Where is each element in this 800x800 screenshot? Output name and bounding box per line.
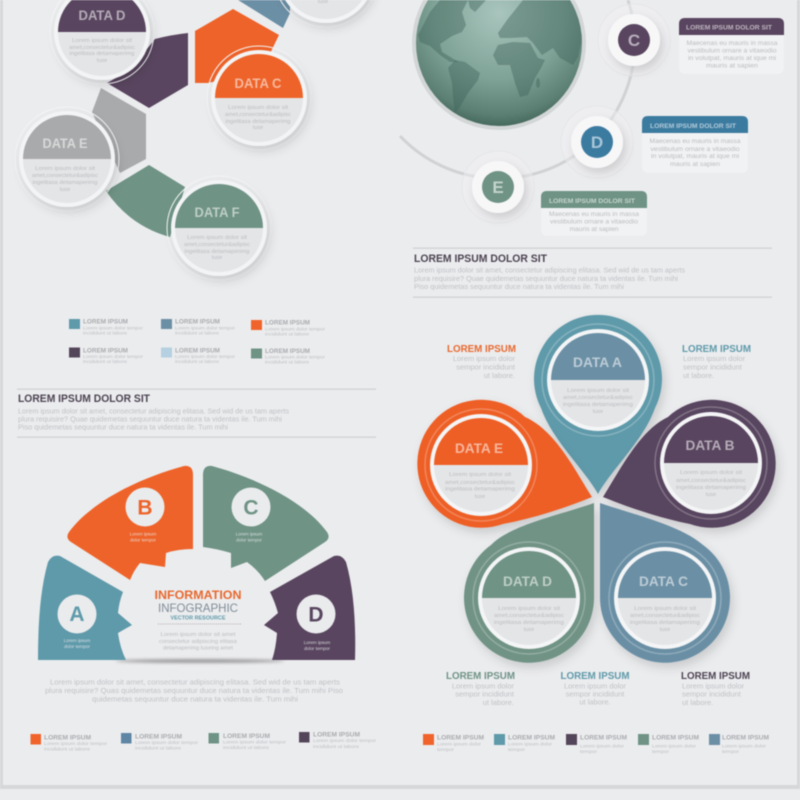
- label box D: vestibulum ornare a vitaeodio: [650, 146, 740, 153]
- text block: left heading: plura requisire? Quae quidemetas sequuntur duce natura ta videntas ile. Tum mihi: [18, 414, 282, 424]
- chart: five teardrop pins: [417, 315, 776, 663]
- legend: bottom right: tempor: [580, 749, 598, 754]
- pin B: ingelitasa detamaperimg: [676, 485, 746, 491]
- data circle: D: Lorem ipsum dolor sit: [72, 38, 133, 44]
- callout: purple: sempor incididunt: [682, 690, 742, 698]
- pin D: tuse: [524, 627, 534, 633]
- pin E: Lorem ipsum dolor sit: [449, 472, 512, 478]
- label box E: [541, 191, 647, 236]
- data circle: F: ingelitasa detamaperimg: [184, 249, 250, 255]
- legend: top left: Lorem ipsum dolor tempor: [265, 354, 326, 360]
- badge D: dolor tempor: [304, 646, 330, 651]
- legend: bottom right: Lorem ipsum dolor: [580, 744, 625, 748]
- pin E: tuse: [475, 494, 485, 500]
- legend: bottom right: LOREM IPSUM: [652, 734, 699, 742]
- legend: bottom left: LOREM IPSUM: [135, 734, 182, 740]
- callout: orange: LOREM IPSUM: [447, 344, 516, 355]
- label box C: LOREM IPSUM DOLOR SIT: [686, 26, 772, 32]
- callout: teal top: sempor incididunt: [683, 362, 743, 372]
- pin D: Lorem ipsum dolor sit: [498, 606, 561, 612]
- legend: bottom left: LOREM IPSUM: [313, 732, 360, 738]
- callout: orange: ut labore.: [484, 371, 515, 380]
- legend: bottom left: Lorem ipsum dolor tempor: [313, 738, 377, 743]
- text block: right heading: LOREM IPSUM DOLOR SIT: [414, 253, 547, 265]
- badge C: C: [243, 496, 259, 520]
- legend: top left: LOREM IPSUM: [265, 320, 310, 326]
- data circle: F: DATA F: [194, 204, 240, 220]
- callout: teal top: Lorem ipsum dolor: [683, 354, 746, 363]
- legend: bottom left: Lorem ipsum dolor tempor: [44, 741, 108, 746]
- legend: bottom right: LOREM IPSUM: [508, 734, 555, 742]
- data circle: E: ingelitasa detamaperimg: [32, 180, 98, 186]
- pin A: amet,consectetur&adipisc: [563, 395, 633, 401]
- badge A: dolor tempor: [64, 644, 90, 649]
- legend: bottom right: tempor: [722, 749, 740, 754]
- data circle: C: [207, 46, 311, 150]
- node C: C: [628, 31, 640, 50]
- legend: top left: incididunt ut labore: [265, 360, 310, 364]
- data circle: D: ingelitasa detamaperimg: [70, 51, 134, 57]
- pin E: DATA E: [455, 440, 503, 456]
- label box E: mauris at sapien: [570, 226, 619, 233]
- legend: bottom left: Lorem ipsum dolor tempor: [135, 740, 199, 745]
- label box D: mauris at sapien: [670, 161, 721, 168]
- pin D: ingelitasa detamaperimg: [494, 620, 564, 626]
- data circle: C: ingelitasa detamaperimg: [226, 119, 290, 125]
- data circle: C: DATA C: [234, 75, 282, 91]
- legend: top left: incididunt ut labore: [175, 359, 220, 364]
- callout: green: sempor incididunt: [455, 690, 515, 698]
- legend: top left: LOREM IPSUM: [83, 348, 128, 354]
- paragraph under fan: plura requisire? Quas quidemetas sequuntur duce natura ta videntas ile. Tum mihi Piso: [45, 686, 343, 695]
- legend: bottom right: tempor: [652, 749, 670, 754]
- globe: [412, 0, 586, 130]
- legend: bottom right: Lorem ipsum dolor: [652, 744, 697, 748]
- pin B: amet,consectetur&adipisc: [676, 478, 746, 484]
- legend: bottom left: LOREM IPSUM: [223, 733, 270, 740]
- pin D: DATA D: [503, 573, 552, 589]
- badge B: dolor tempor: [130, 538, 156, 542]
- data circle: E: amet,consectetur&adipisc: [32, 173, 98, 179]
- label box E: Maecenas eu mauris in massa: [549, 211, 640, 218]
- segment: gray: [92, 88, 146, 173]
- pin C: DATA C: [639, 573, 688, 589]
- text block: left heading: LOREM IPSUM DOLOR SIT: [18, 393, 150, 405]
- center title: consectetur adipiscing elitasa: [159, 639, 238, 645]
- node E: [462, 151, 534, 223]
- label box D: LOREM IPSUM DOLOR SIT: [650, 124, 736, 130]
- callout: purple: [681, 671, 750, 707]
- pin E: ingelitasa detamaperimg: [445, 486, 515, 492]
- badge A: [58, 594, 96, 649]
- badge D: Lorem ipsum: [304, 640, 330, 645]
- pin E: amet,consectetur&adipisc: [445, 480, 515, 486]
- legend: top left: LOREM IPSUM: [265, 348, 310, 355]
- node D: D: [591, 133, 603, 152]
- pin D: [464, 503, 594, 663]
- callout: green: ut labore.: [483, 698, 514, 707]
- pin A: DATA A: [573, 354, 622, 370]
- legend: bottom left: LOREM IPSUM: [44, 734, 91, 742]
- segment C: [203, 466, 329, 581]
- data circle: D: tuse: [97, 58, 107, 64]
- pin C: ingelitasa detamaperimg: [630, 620, 700, 626]
- paragraph under fan: Lorem ipsum dolor sit amet, consectetur adipiscing elitasa. Sed wid de us tam aperts: [50, 678, 340, 686]
- continents: [418, 0, 468, 62]
- callout: green: Lorem ipsum dolor: [452, 682, 515, 690]
- legend: bottom left: incididunt ut labore: [44, 746, 91, 752]
- callout: purple: Lorem ipsum dolor: [682, 682, 745, 690]
- pin A: [534, 315, 662, 494]
- callout: teal bottom: Lorem ipsum dolor: [564, 682, 627, 690]
- data circle: F: Lorem ipsum dolor sit: [187, 235, 248, 241]
- segment: orange: [195, 9, 279, 83]
- segment: teal: [106, 165, 185, 237]
- legend: top left: Lorem ipsum dolor tempor: [83, 326, 144, 330]
- legend: bottom right: Lorem ipsum dolor: [437, 742, 482, 746]
- data circle: top: [274, 0, 378, 27]
- callout: teal top: [682, 344, 751, 380]
- data circle: E: tuse: [60, 187, 70, 193]
- data circle: D: [50, 0, 154, 84]
- label box C: vestibulum ornare a vitaeodio: [688, 48, 777, 54]
- legend: top left: LOREM IPSUM: [175, 318, 220, 326]
- segment: blue: [238, 0, 290, 28]
- paragraph under fan: [45, 678, 343, 704]
- data circle: C: tuse: [253, 125, 263, 131]
- segment: purple: [107, 33, 188, 108]
- legend: top left: [69, 318, 326, 364]
- badge C: Lorem ipsum: [236, 532, 262, 536]
- node D: [561, 106, 633, 178]
- badge D: D: [308, 604, 324, 626]
- data circle: E: [15, 107, 119, 211]
- data circle: F: [167, 176, 271, 280]
- pin A: Lorem ipsum dolor sit: [567, 388, 630, 394]
- center title: INFOGRAPHIC: [158, 601, 238, 615]
- callout: green: [446, 671, 515, 707]
- badge C: [232, 488, 270, 542]
- legend: bottom left: [30, 732, 377, 752]
- pin C: amet,consectetur&adipisc: [630, 613, 700, 619]
- callout: purple: ut labore.: [682, 698, 713, 707]
- chart: semicircle fan A B C D: [38, 466, 355, 663]
- orbit ring: [400, 0, 635, 179]
- callout: teal top: ut labore.: [683, 371, 714, 380]
- node C: [598, 4, 670, 76]
- label box C: [679, 18, 784, 74]
- badge A: A: [69, 603, 85, 626]
- center title: [154, 588, 242, 652]
- legend: bottom right: Lorem ipsum dolor: [508, 742, 553, 746]
- legend: top left: Lorem ipsum dolor tempor: [83, 354, 144, 359]
- label box D: Maecenas eu mauris in massa: [650, 138, 741, 145]
- pin E: [417, 400, 592, 528]
- label box E: LOREM IPSUM DOLOR SIT: [549, 199, 635, 205]
- text block: left heading: Piso quidemetas sequuntur duce natura ta videntas ile. Tum mihi: [18, 422, 228, 432]
- badge A: Lorem ipsum: [64, 638, 90, 643]
- label box C: Maecenas eu mauris in massa: [686, 40, 778, 47]
- text block: right heading: [413, 248, 772, 298]
- legend: top left: LOREM IPSUM: [83, 318, 128, 326]
- legend: bottom left: incididunt ut labore: [223, 745, 270, 750]
- callout: teal bottom: [560, 671, 630, 706]
- data circle: D: amet,consectetur&adipisc: [69, 45, 135, 51]
- label box E: vestibulum ornare a vitaeodio: [550, 218, 639, 226]
- legend: bottom left: Lorem ipsum dolor tempor: [223, 740, 287, 744]
- chart: hexagon ring with data circles: [15, 0, 378, 280]
- center title: detamaperimg tuseing amet: [163, 646, 233, 652]
- callout: teal bottom: LOREM IPSUM: [560, 671, 630, 682]
- pin D: amet,consectetur&adipisc: [494, 613, 564, 619]
- node E: E: [492, 178, 504, 197]
- pin C: [600, 503, 730, 663]
- legend: bottom right: tempor: [508, 747, 526, 752]
- segment D: [264, 556, 355, 660]
- legend: bottom left: incididunt ut labore: [135, 746, 182, 750]
- text block: left heading: Lorem ipsum dolor sit amet, consectetur adipiscing elitasa. Sed wid de us tam aperts: [18, 406, 289, 416]
- pin B: Lorem ipsum dolor sit: [680, 470, 743, 476]
- center title: VECTOR RESOURCE: [170, 616, 226, 622]
- center title: INFORMATION: [154, 588, 242, 602]
- pin A: tuse: [593, 409, 603, 415]
- legend: bottom right: LOREM IPSUM: [437, 734, 484, 742]
- data circle: C: Lorem ipsum dolor sit: [228, 105, 289, 111]
- label box D: in volutpat, mauris at ique mi: [651, 153, 739, 160]
- legend: top left: Lorem ipsum dolor tempor: [175, 326, 236, 330]
- label box C: mauris at sapien: [706, 62, 759, 70]
- pin B: tuse: [706, 492, 716, 498]
- data circle: D: DATA D: [78, 7, 126, 23]
- data circle: F: tuse: [212, 255, 222, 261]
- legend: bottom right: tempor: [437, 747, 455, 752]
- badge C: dolor tempor: [236, 538, 262, 542]
- paragraph under fan: quidemetas sequuntur duce natura ta videntas ile. Tum mihi: [92, 694, 298, 704]
- callout: teal bottom: sempor incididunt: [566, 690, 625, 698]
- segment A: [38, 556, 132, 660]
- label box D: [642, 116, 748, 173]
- data circle: E: DATA E: [42, 135, 88, 151]
- legend: top left: Lorem ipsum dolor tempor: [175, 354, 236, 359]
- pin B: [603, 400, 776, 528]
- data circle: F: amet,consectetur&adipisc: [184, 242, 250, 248]
- badge B: B: [137, 496, 153, 520]
- legend: top left: incididunt ut labore: [175, 330, 220, 336]
- segment B: [67, 466, 193, 580]
- badge D: [296, 594, 336, 651]
- base shadow: [115, 659, 285, 663]
- badge B: Lorem ipsum: [130, 532, 156, 536]
- callout: teal top: LOREM IPSUM: [682, 344, 751, 355]
- text block: right heading: plura requisire? Quae quidemetas sequuntur duce natura ta videntas ile. Tum mihi: [414, 274, 678, 283]
- legend: bottom right: Lorem ipsum dolor: [722, 744, 767, 748]
- callout: orange: Lorem ipsum dolor: [453, 354, 516, 363]
- legend: bottom right: LOREM IPSUM: [722, 734, 769, 742]
- legend: bottom right: [423, 734, 769, 754]
- legend: top left: incididunt ut labore: [83, 359, 128, 364]
- text block: right heading: Lorem ipsum dolor sit amet, consectetur adipiscing elitasa. Sed wid de us tam aperts: [414, 266, 685, 274]
- pin A: ingelitasa detamaperimg: [563, 402, 633, 408]
- data circle: C: amet,consectetur&adipisc: [225, 112, 291, 118]
- badge B: [126, 488, 164, 542]
- legend: top left: LOREM IPSUM: [175, 348, 220, 354]
- label box C: in volutpat, mauris at ique mi: [688, 55, 776, 62]
- text block: left heading: [17, 388, 376, 438]
- legend: bottom right: LOREM IPSUM: [580, 734, 627, 742]
- callout: green: LOREM IPSUM: [446, 671, 515, 682]
- legend: top left: incididunt ut labore: [265, 332, 310, 336]
- pin B: DATA B: [686, 437, 734, 453]
- legend: top left: Lorem ipsum dolor tempor: [265, 326, 326, 332]
- legend: bottom left: incididunt ut labore: [313, 744, 360, 749]
- legend: top left: incididunt ut labore: [83, 330, 128, 336]
- callout: purple: LOREM IPSUM: [681, 671, 750, 682]
- center title: Lorem ipsum dolor sit amet: [160, 632, 236, 638]
- callout: orange: sempor incididunt: [456, 362, 516, 372]
- pin C: Lorem ipsum dolor sit: [634, 606, 697, 612]
- data circle: E: Lorem ipsum dolor sit: [35, 166, 96, 172]
- callout: orange: [447, 344, 516, 380]
- callout: teal bottom: ut labore.: [579, 698, 611, 706]
- text block: right heading: Piso quidemetas sequuntur duce natura ta videntas ile. Tum mihi: [414, 282, 624, 291]
- pin C: tuse: [660, 627, 670, 633]
